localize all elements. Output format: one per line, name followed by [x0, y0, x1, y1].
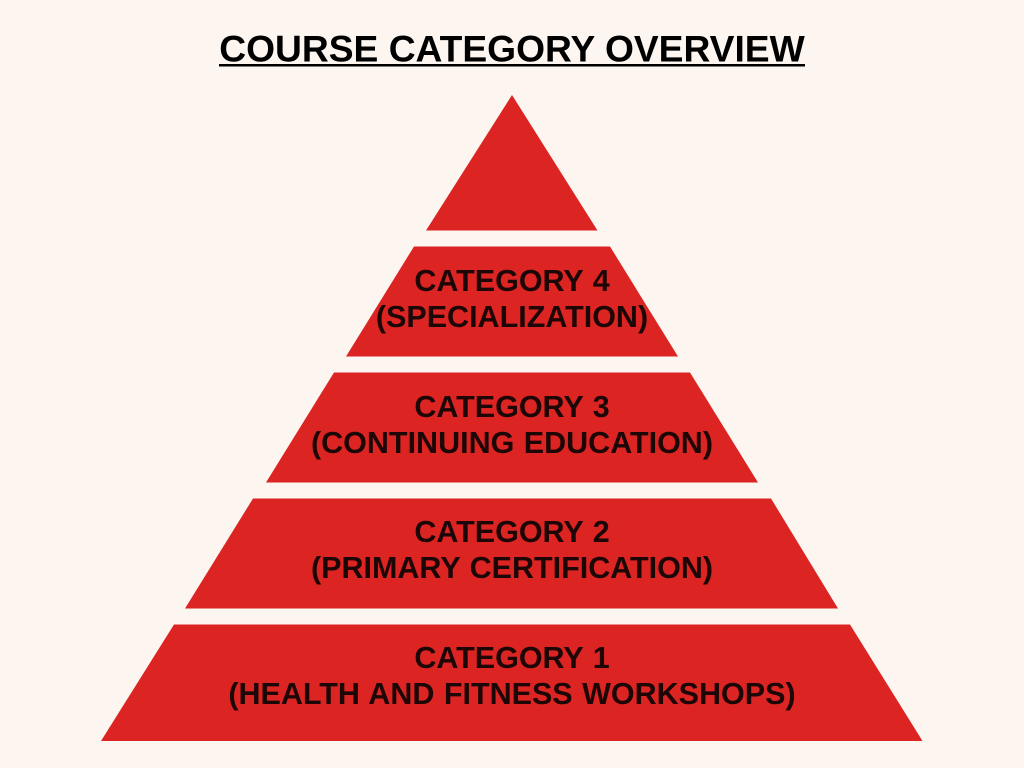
tier: category 1: (HEALTH AND FITNESS WORKSHOPS) — [228, 677, 796, 711]
tier: category 4: CATEGORY 4 — [414, 264, 610, 298]
title: COURSE CATEGORY OVERVIEW — [219, 28, 806, 70]
tier: category 1 — [101, 624, 922, 741]
tier: category 2: (PRIMARY CERTIFICATION) — [311, 551, 713, 585]
tier: category 4: (SPECIALIZATION) — [376, 300, 648, 334]
tier: category 3: CATEGORY 3 — [414, 390, 610, 424]
tier: category 4 — [346, 246, 678, 356]
pyramid apex triangle — [426, 95, 598, 230]
pyramid chart — [101, 95, 922, 741]
tier: category 2 — [185, 498, 838, 608]
tier: category 2: CATEGORY 2 — [414, 515, 610, 549]
tier: category 3 — [266, 372, 758, 482]
tier: category 3: (CONTINUING EDUCATION) — [311, 426, 713, 460]
tier: category 1: CATEGORY 1 — [414, 641, 610, 675]
